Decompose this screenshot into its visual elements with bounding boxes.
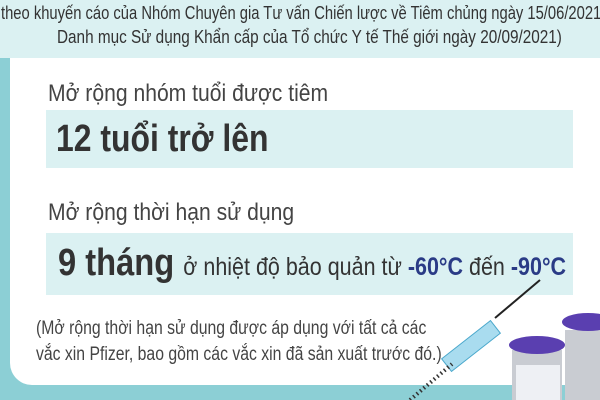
note text <box>36 318 442 365</box>
icon: vial 1 <box>509 336 565 400</box>
box: 12 years <box>46 110 573 168</box>
header text line 1: theo khuyến cáo của Nhóm Chuyên gia Tư vấn Chiến lược về Tiêm chủng ngày 15/06/2021 <box>1 3 600 23</box>
box: 9 months: 9 tháng ở nhiệt độ bảo quản từ -60°C đến -90°C <box>58 242 566 284</box>
header band <box>0 0 600 58</box>
note text: (Mở rộng thời hạn sử dụng được áp dụng với tất cả các <box>36 318 426 339</box>
icon: vial 2 <box>562 313 600 400</box>
icon: syringe <box>410 280 540 400</box>
box: 9 months <box>46 233 573 295</box>
label: shelf life: Mở rộng thời hạn sử dụng <box>48 199 294 226</box>
header text line 2: Danh mục Sử dụng Khẩn cấp của Tổ chức Y tế Thế giới ngày 20/09/2021) <box>57 27 562 47</box>
box: 12 years: 12 tuổi trở lên <box>56 118 268 160</box>
note text: vắc xin Pfizer, bao gồm các vắc xin đã sản xuất trước đó.) <box>36 344 442 365</box>
label: age group: Mở rộng nhóm tuổi được tiêm <box>48 80 328 107</box>
